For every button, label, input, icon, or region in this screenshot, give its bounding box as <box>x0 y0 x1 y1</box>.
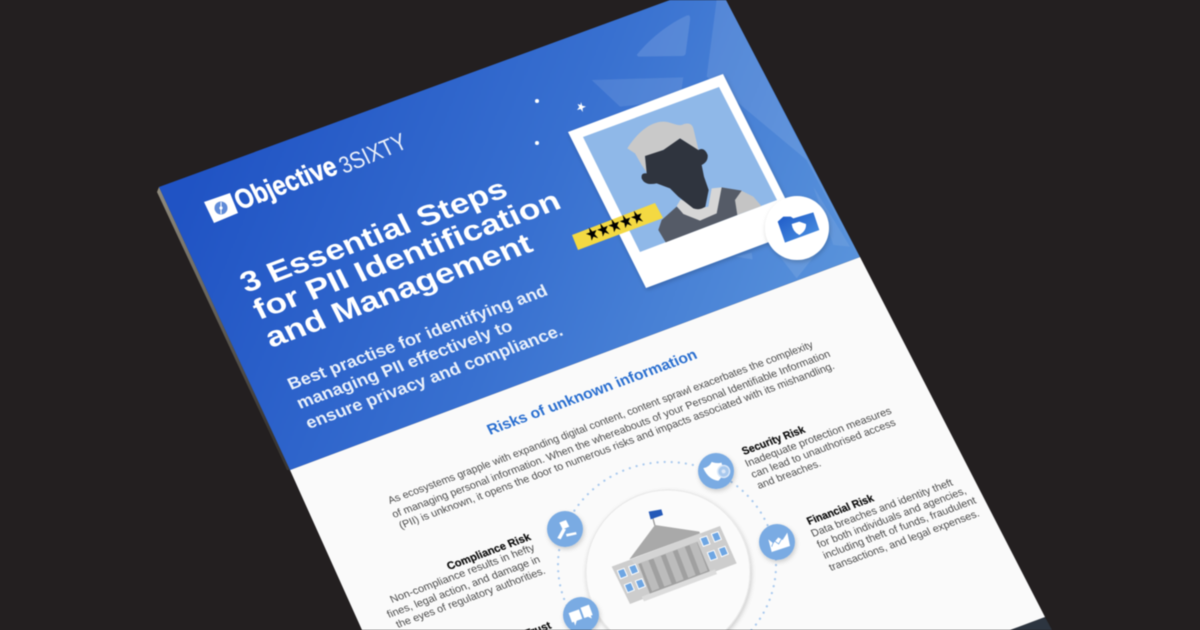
shoulder <box>733 190 761 215</box>
subtitle: ensure privacy and compliance. <box>302 321 566 433</box>
text: security risk: Inadequate protection measures <box>743 405 894 470</box>
title: 3 Essential Steps <box>235 173 513 299</box>
text: financial risk: for both individuals and agencies, <box>815 485 969 551</box>
panel: photo card <box>568 74 829 288</box>
person illustration <box>627 122 761 242</box>
icon: financial chart <box>759 524 795 560</box>
logo mark <box>204 193 238 223</box>
intro paragraph: As ecosystems grapple with expanding digital content, content sprawl exacerbates the complexity <box>386 339 816 507</box>
logo <box>204 129 411 223</box>
folder badge <box>765 196 829 260</box>
text: compliance risk: the eyes of regulatory authorities. <box>394 565 548 630</box>
text: compliance risk: Compliance Risk <box>445 531 534 573</box>
text: financial risk: Data breaches and identity theft <box>809 477 955 540</box>
text: security risk: can lead to unauthorised access <box>749 417 898 481</box>
intro paragraph: (PII) is unknown, it opens the door to numerous risks and impacts associated with its mishandling. <box>397 360 837 532</box>
columns <box>638 542 710 594</box>
intro paragraph: of managing personal information. When the whereabouts of your Personal Identifiable Information <box>390 348 833 521</box>
text: compliance risk <box>385 531 548 630</box>
subtitle: managing PII effectively to <box>293 316 516 413</box>
sparkles <box>535 99 586 145</box>
text: compliance risk: fines, legal action, and damage in <box>385 554 542 621</box>
subtitle <box>284 281 566 433</box>
text: security risk <box>740 405 898 492</box>
title: and Management <box>260 228 538 354</box>
windows <box>617 532 728 593</box>
page bottom dark band <box>1010 617 1052 630</box>
building illustration <box>612 509 737 604</box>
logo wordmark: Objective <box>229 151 342 215</box>
pediment <box>629 525 700 559</box>
dotted ring <box>558 462 776 630</box>
decorative compass shapes <box>592 0 858 278</box>
password tag: ★★★★★ <box>582 207 648 245</box>
text: compliance risk: Non-compliance results in hefty <box>388 542 538 606</box>
base step <box>642 569 717 601</box>
face <box>642 138 709 209</box>
text: financial risk: including theft of funds, fraudulent <box>821 495 978 562</box>
text: financial risk <box>805 477 981 574</box>
folder icon <box>778 212 819 243</box>
title <box>235 173 566 354</box>
icon: trust chat bubbles <box>563 597 599 630</box>
text: financial risk: Financial Risk <box>805 492 877 528</box>
central circle with building <box>586 490 750 630</box>
panel: white page body <box>290 257 1045 630</box>
card frame <box>568 74 801 288</box>
subtitle: Best practise for identifying and <box>284 281 551 394</box>
photo background <box>583 87 777 252</box>
icon: security shield <box>698 453 734 489</box>
title: for PII Identification <box>248 185 566 326</box>
vest <box>658 187 742 242</box>
building body <box>612 526 737 604</box>
text: security risk: and breaches. <box>755 458 823 492</box>
collar <box>677 187 722 221</box>
text: security risk: Security Risk <box>740 424 808 458</box>
icon: gavel <box>547 511 583 547</box>
flag <box>649 509 663 526</box>
heading: risks: Risks of unknown information <box>484 346 700 439</box>
hair <box>627 122 699 173</box>
panel: blue header <box>159 0 860 470</box>
logo suffix: 3SIXTY <box>335 129 411 179</box>
page edge thickness <box>157 187 290 470</box>
text: financial risk: transactions, and legal expenses. <box>827 508 981 574</box>
